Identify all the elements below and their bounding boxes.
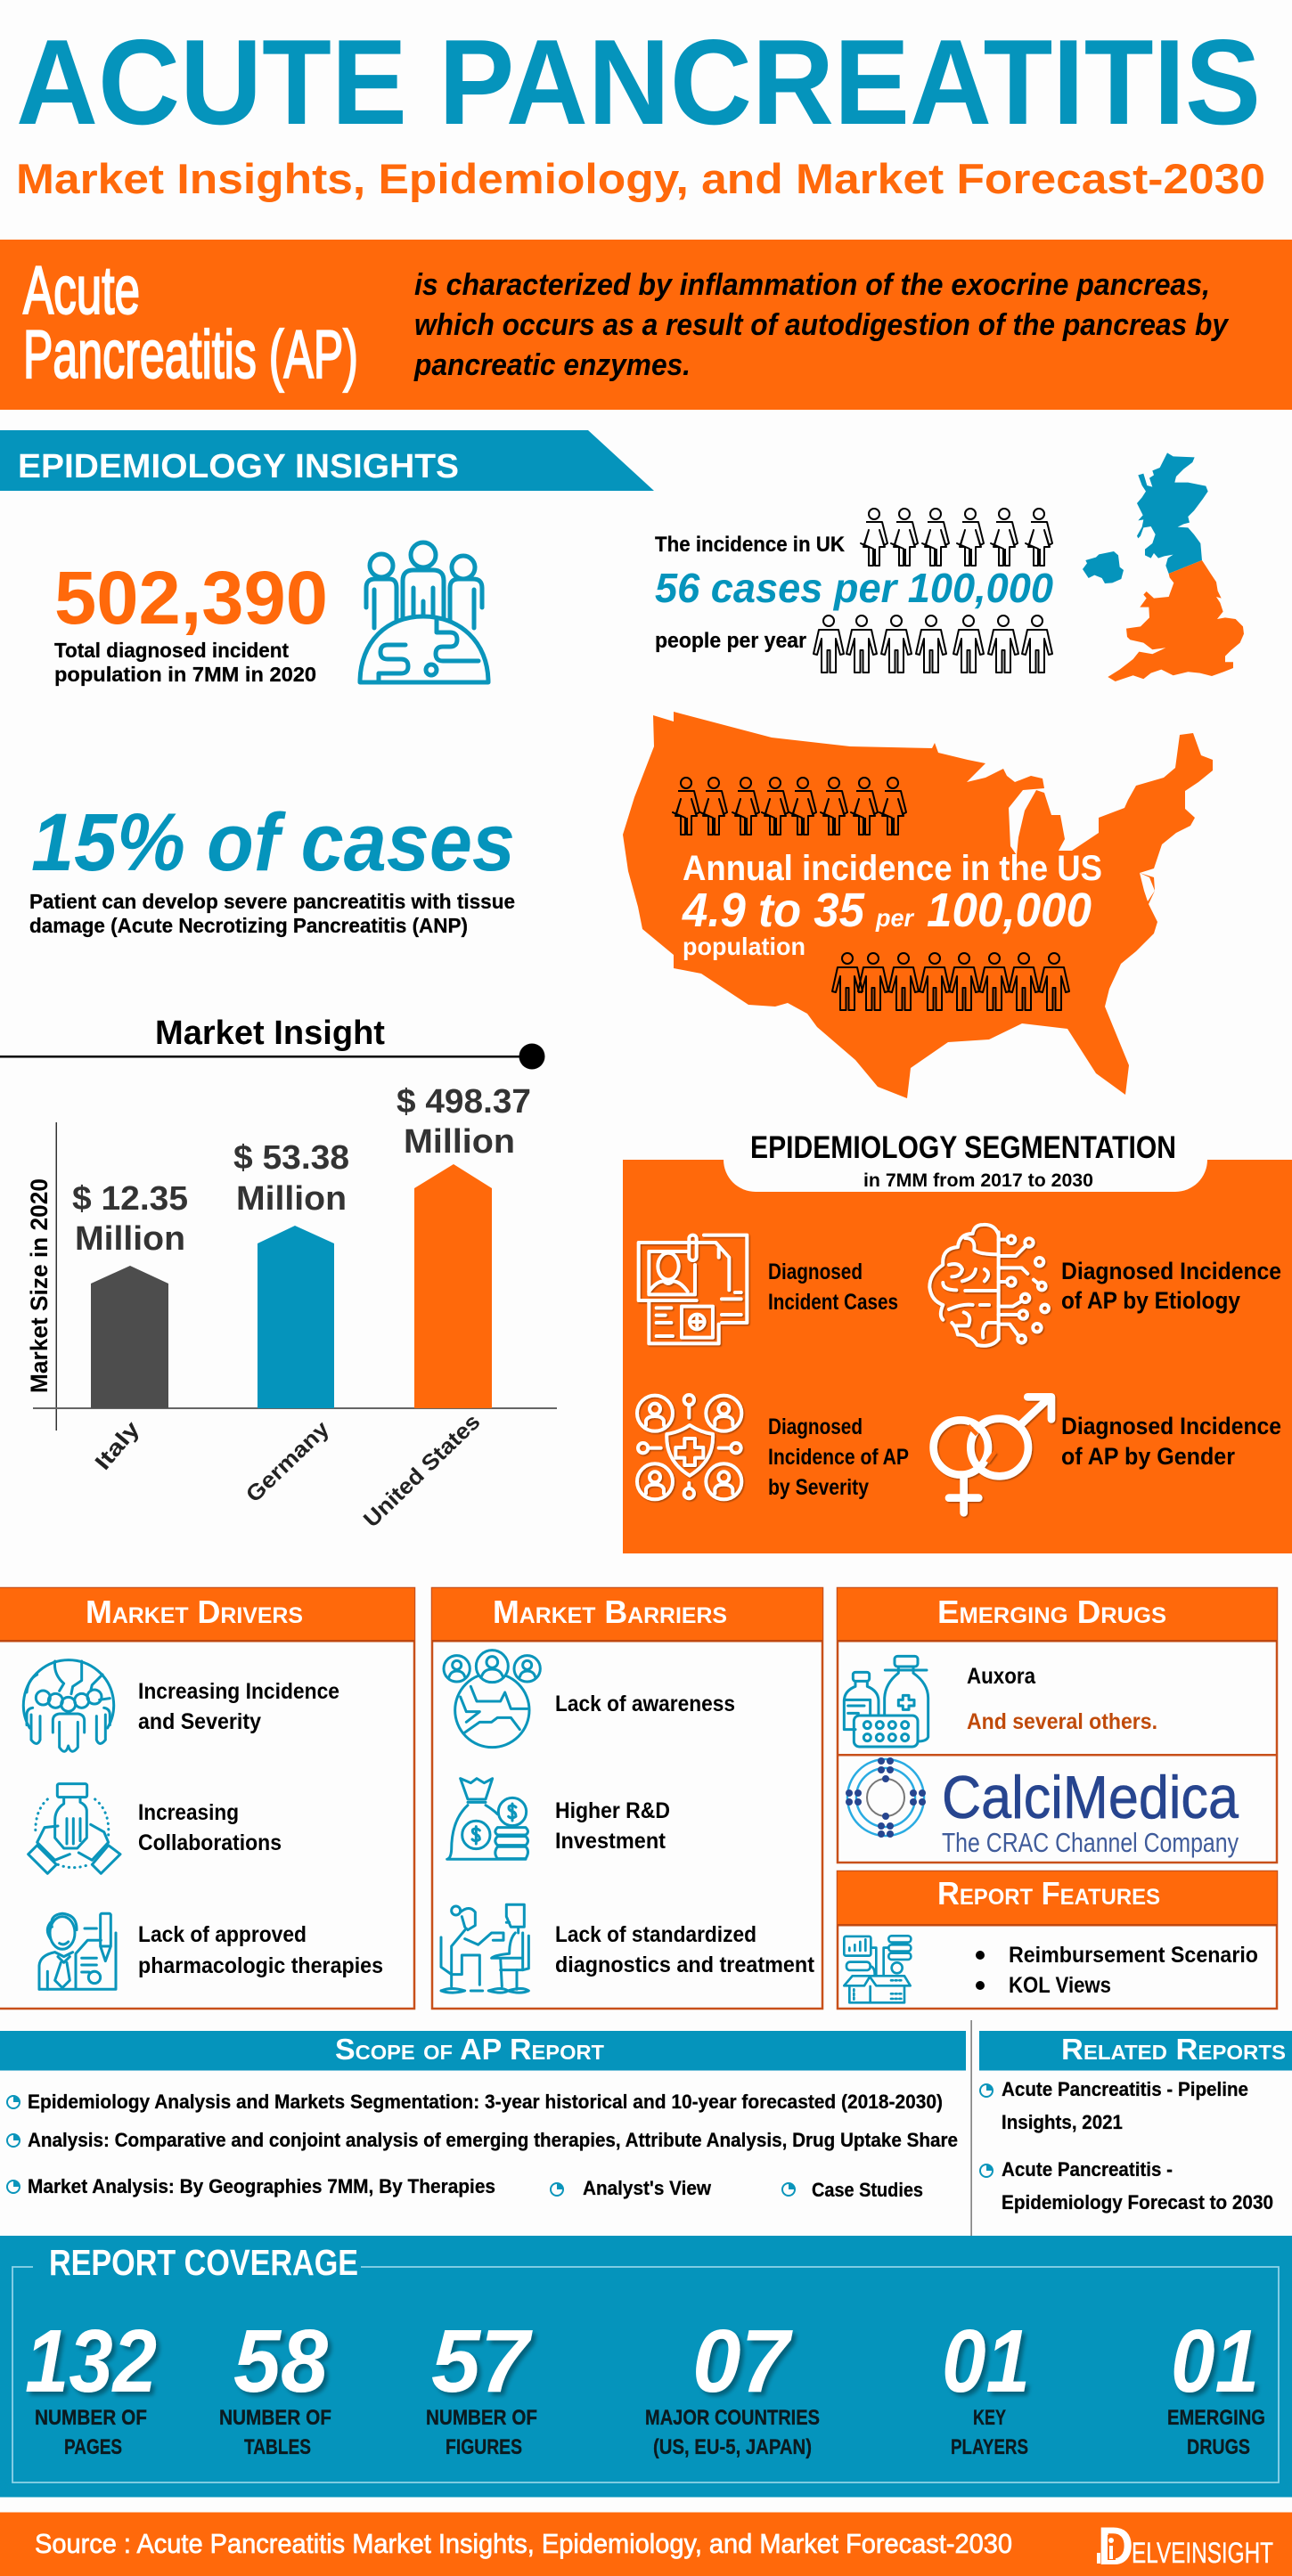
- heading: Acute Pancreatitis (AP): [23, 253, 358, 393]
- text: by severity: Diagnosed: [768, 1414, 863, 1439]
- panel: scope of AP report: Scope of AP Report: [335, 2033, 604, 2066]
- icons: men row UK: [814, 615, 1052, 673]
- text: and several others: And several others.: [967, 1709, 1157, 1734]
- text: Auxora: Auxora: [967, 1664, 1036, 1689]
- text: diagnosed incident cases: [768, 1259, 898, 1315]
- bar: United States: $ 498.37: [397, 1083, 531, 1121]
- stat: major countries: MAJOR COUNTRIES: [645, 2406, 820, 2430]
- list: related items: Epidemiology Forecast to 2030: [1002, 2191, 1273, 2213]
- stat: 502,390: population in 7MM in 2020: [54, 663, 316, 686]
- list: related items: Acute Pancreatitis -: [1002, 2158, 1173, 2181]
- text: by severity: Incidence of AP: [768, 1445, 909, 1470]
- list: related items: Acute Pancreatitis - Pipeline: [1002, 2078, 1248, 2100]
- text: increasing collaborations: Collaborations: [138, 1830, 282, 1855]
- text: annual incidence in the US: per: [875, 904, 915, 932]
- stat: 502,390: Total diagnosed incident: [54, 639, 289, 662]
- bar: Germany: $ 53.38: [233, 1139, 349, 1177]
- text: annual incidence in the US: 100,000: [927, 884, 1092, 937]
- bar: Italy: Italy: [90, 1416, 145, 1475]
- text: lack of approved therapies: Lack of approved: [138, 1922, 307, 1947]
- header pill: in 7MM from 2017 to 2030: [863, 1170, 1093, 1191]
- text: by gender: [1061, 1413, 1281, 1470]
- text: by gender: of AP by Gender: [1061, 1443, 1235, 1470]
- axis label: Market Size in 2020: [26, 1178, 53, 1393]
- list: related items: Insights, 2021: [1002, 2111, 1123, 2133]
- stat: figures: [426, 2311, 537, 2459]
- heading: Acute Pancreatitis (AP): Pancreatitis (AP): [23, 317, 358, 393]
- stat: major countries: [645, 2311, 820, 2459]
- footer: [0, 2512, 1292, 2576]
- stat: UK incidence: [655, 533, 1053, 653]
- icon: people and globe: [444, 1651, 540, 1748]
- icon: doctor and patient: [441, 1904, 528, 1993]
- list: related items: [980, 2078, 1273, 2213]
- text: increasing incidence: [138, 1679, 339, 1734]
- icons: women row UK: [861, 509, 1052, 566]
- panel: market drivers: [0, 1588, 414, 2009]
- heading: Acute Pancreatitis (AP): Acute: [23, 253, 140, 329]
- stat: 15% of cases: damage (Acute Necrotizing Pancreatitis (ANP): [29, 914, 468, 937]
- text: increasing incidence: Increasing Incidence: [138, 1679, 339, 1704]
- panel: report coverage: [0, 2236, 1292, 2498]
- banner: epidemiology insights: [0, 430, 654, 491]
- panel: report features: Report Features: [937, 1875, 1160, 1912]
- panel: market drivers: Market Drivers: [86, 1594, 303, 1630]
- definition text: [413, 268, 1230, 382]
- stat: tables: [219, 2311, 331, 2459]
- text: lack of awareness: Lack of awareness: [555, 1692, 735, 1716]
- text: diagnosed incident cases: Incident Cases: [768, 1290, 898, 1315]
- panel: emerging drugs: [838, 1588, 1277, 1863]
- bar chart: market size in 2020: [26, 1083, 557, 1532]
- stat: figures: 57: [431, 2311, 533, 2411]
- stat: emerging drugs: [1167, 2311, 1265, 2459]
- panel: scope of AP report: [0, 2031, 966, 2201]
- bar: Italy: [72, 1180, 188, 1475]
- header pill: [724, 1123, 1207, 1192]
- stat: 502,390: 502,390: [54, 556, 328, 640]
- icon: physician with document: [39, 1913, 116, 1989]
- stat: tables: TABLES: [244, 2435, 311, 2459]
- map: US: [623, 712, 1213, 1098]
- list: scope items: Analysis: Comparative and conjoint analysis of emerging therapies, Attribute Analysis, Drug Uptake Share: [28, 2129, 958, 2151]
- definition text: is characterized by inflammation of the exocrine pancreas,: [414, 268, 1210, 302]
- icon: patient documents: [639, 1235, 747, 1343]
- text: by severity: [768, 1414, 909, 1500]
- bar: Germany: Germany: [241, 1416, 334, 1507]
- map: UK: [1083, 452, 1244, 681]
- panel: related reports: Related Reports: [1061, 2033, 1286, 2066]
- bar: United States: Million: [404, 1123, 515, 1161]
- icons: women row US: [673, 778, 906, 835]
- panel: definition band: [0, 240, 1292, 410]
- list: scope items: Market Analysis: By Geographies 7MM, By Therapies: [28, 2175, 495, 2197]
- header pill: EPIDEMIOLOGY SEGMENTATION: [750, 1130, 1176, 1165]
- list: report features: KOL Views: [1009, 1973, 1111, 1998]
- panel: emerging drugs: Emerging Drugs: [937, 1594, 1166, 1630]
- text: lack of standardized diagnostics: diagnostics and treatment: [555, 1952, 815, 1977]
- panel: report features: [838, 1871, 1277, 2009]
- icon: report box: [844, 1936, 911, 2002]
- bar: Italy: $ 12.35: [72, 1180, 188, 1218]
- text: diagnosed incident cases: Diagnosed: [768, 1259, 863, 1284]
- text: higher R&D investment: Higher R&D: [555, 1798, 670, 1823]
- stat: pages: 132: [25, 2311, 157, 2411]
- stat: figures: NUMBER OF: [426, 2406, 537, 2430]
- icons: men row US: [832, 953, 1069, 1010]
- panel: epidemiology segmentation: [623, 1123, 1292, 1553]
- bar: Germany: Million: [236, 1180, 347, 1218]
- stat: 15% of cases: [29, 797, 515, 937]
- stat: 15% of cases: Patient can develop severe pancreatitis with tissue: [29, 890, 515, 913]
- text: by etiology: [1061, 1258, 1281, 1314]
- bar: Italy: Million: [75, 1220, 185, 1258]
- panel: market barriers: [432, 1588, 822, 2009]
- bar: Germany: [233, 1139, 349, 1507]
- icon: brain circuit: [929, 1225, 1049, 1346]
- icon: severity network: [637, 1395, 741, 1499]
- stat: tables: NUMBER OF: [219, 2406, 331, 2430]
- text: by etiology: of AP by Etiology: [1061, 1287, 1240, 1314]
- source text: Source : Acute Pancreatitis Market Insights, Epidemiology, and Market Forecast-2030: [35, 2528, 1012, 2559]
- stat: key players: PLAYERS: [951, 2435, 1028, 2459]
- stat: pages: [25, 2311, 157, 2459]
- text: annual incidence in the US: 4.9 to 35: [682, 884, 865, 937]
- icon: global population: [23, 1660, 114, 1751]
- stat: UK incidence: The incidence in UK: [655, 533, 846, 557]
- stat: major countries: 07: [692, 2311, 793, 2411]
- text: higher R&D investment: [555, 1798, 670, 1854]
- stat: 502,390: [54, 556, 328, 686]
- icon: collaboration hands: [29, 1784, 120, 1873]
- stat: 15% of cases: 15% of cases: [31, 797, 515, 888]
- text: higher R&D investment: Investment: [555, 1829, 666, 1854]
- stat: major countries: (US, EU-5, JAPAN): [653, 2435, 812, 2459]
- heading: market insight: Market Insight: [155, 1015, 385, 1052]
- list: report features: [976, 1943, 1258, 1998]
- logo: DelveInsight: [1097, 2516, 1273, 2576]
- heading: market insight: [0, 1015, 545, 1069]
- stat: figures: FIGURES: [446, 2435, 522, 2459]
- panel: related reports: [979, 2031, 1292, 2213]
- stat: pages: NUMBER OF: [35, 2406, 147, 2430]
- logo: CalciMedica: [846, 1757, 1239, 1858]
- banner: epidemiology insights: EPIDEMIOLOGY INSIGHTS: [18, 448, 459, 485]
- list: report features: Reimbursement Scenario: [1009, 1943, 1258, 1968]
- stat: emerging drugs: EMERGING: [1167, 2406, 1265, 2430]
- stat: UK incidence: 56 cases per 100,000: [655, 565, 1053, 611]
- logo: DelveInsight: D: [1098, 2516, 1133, 2576]
- definition text: pancreatic enzymes.: [413, 348, 691, 382]
- icon: money bag and coins: [447, 1779, 527, 1859]
- text: lack of standardized diagnostics: [555, 1922, 815, 1977]
- text: annual incidence in the US: population: [683, 933, 805, 960]
- heading: report coverage: REPORT COVERAGE: [49, 2242, 358, 2283]
- text: annual incidence in the US: [682, 849, 1102, 960]
- list: scope items: Case Studies: [812, 2179, 923, 2201]
- stat: UK incidence: people per year: [655, 629, 806, 653]
- stat: key players: KEY: [973, 2406, 1006, 2430]
- stat: tables: 58: [233, 2311, 328, 2411]
- subtitle: Market Insights, Epidemiology, and Market Forecast-2030: [16, 155, 1265, 202]
- definition text: which occurs as a result of autodigestion of the pancreas by: [414, 308, 1230, 342]
- text: increasing collaborations: [138, 1800, 282, 1855]
- stat: pages: PAGES: [64, 2435, 122, 2459]
- stat: key players: [942, 2311, 1030, 2459]
- text: lack of approved therapies: [138, 1922, 383, 1978]
- bar: United States: [359, 1083, 531, 1532]
- text: increasing collaborations: Increasing: [138, 1800, 239, 1825]
- icon: gender symbols: [934, 1397, 1051, 1512]
- list: scope items: Epidemiology Analysis and Markets Segmentation: 3-year historical and 10-year forecasted (2018-2030): [28, 2091, 943, 2113]
- list: scope items: Analyst's View: [583, 2177, 711, 2199]
- list: scope items: [7, 2091, 958, 2201]
- panel: market barriers: Market Barriers: [493, 1594, 727, 1630]
- text: lack of approved therapies: pharmacologic therapies: [138, 1953, 383, 1978]
- bar: United States: United States: [359, 1409, 485, 1532]
- stat: emerging drugs: 01: [1171, 2311, 1259, 2411]
- icon: medicine bottles: [844, 1656, 928, 1747]
- text: increasing incidence: and Severity: [138, 1709, 261, 1734]
- text: annual incidence in the US: Annual incidence in the US: [683, 849, 1102, 888]
- icon: people on globe: [360, 542, 488, 682]
- stat: key players: 01: [942, 2311, 1030, 2411]
- stat: emerging drugs: DRUGS: [1187, 2435, 1250, 2459]
- text: by severity: by Severity: [768, 1475, 869, 1500]
- text: lack of standardized diagnostics: Lack of standardized: [555, 1922, 756, 1947]
- logo: CalciMedica: CalciMedica: [942, 1764, 1239, 1831]
